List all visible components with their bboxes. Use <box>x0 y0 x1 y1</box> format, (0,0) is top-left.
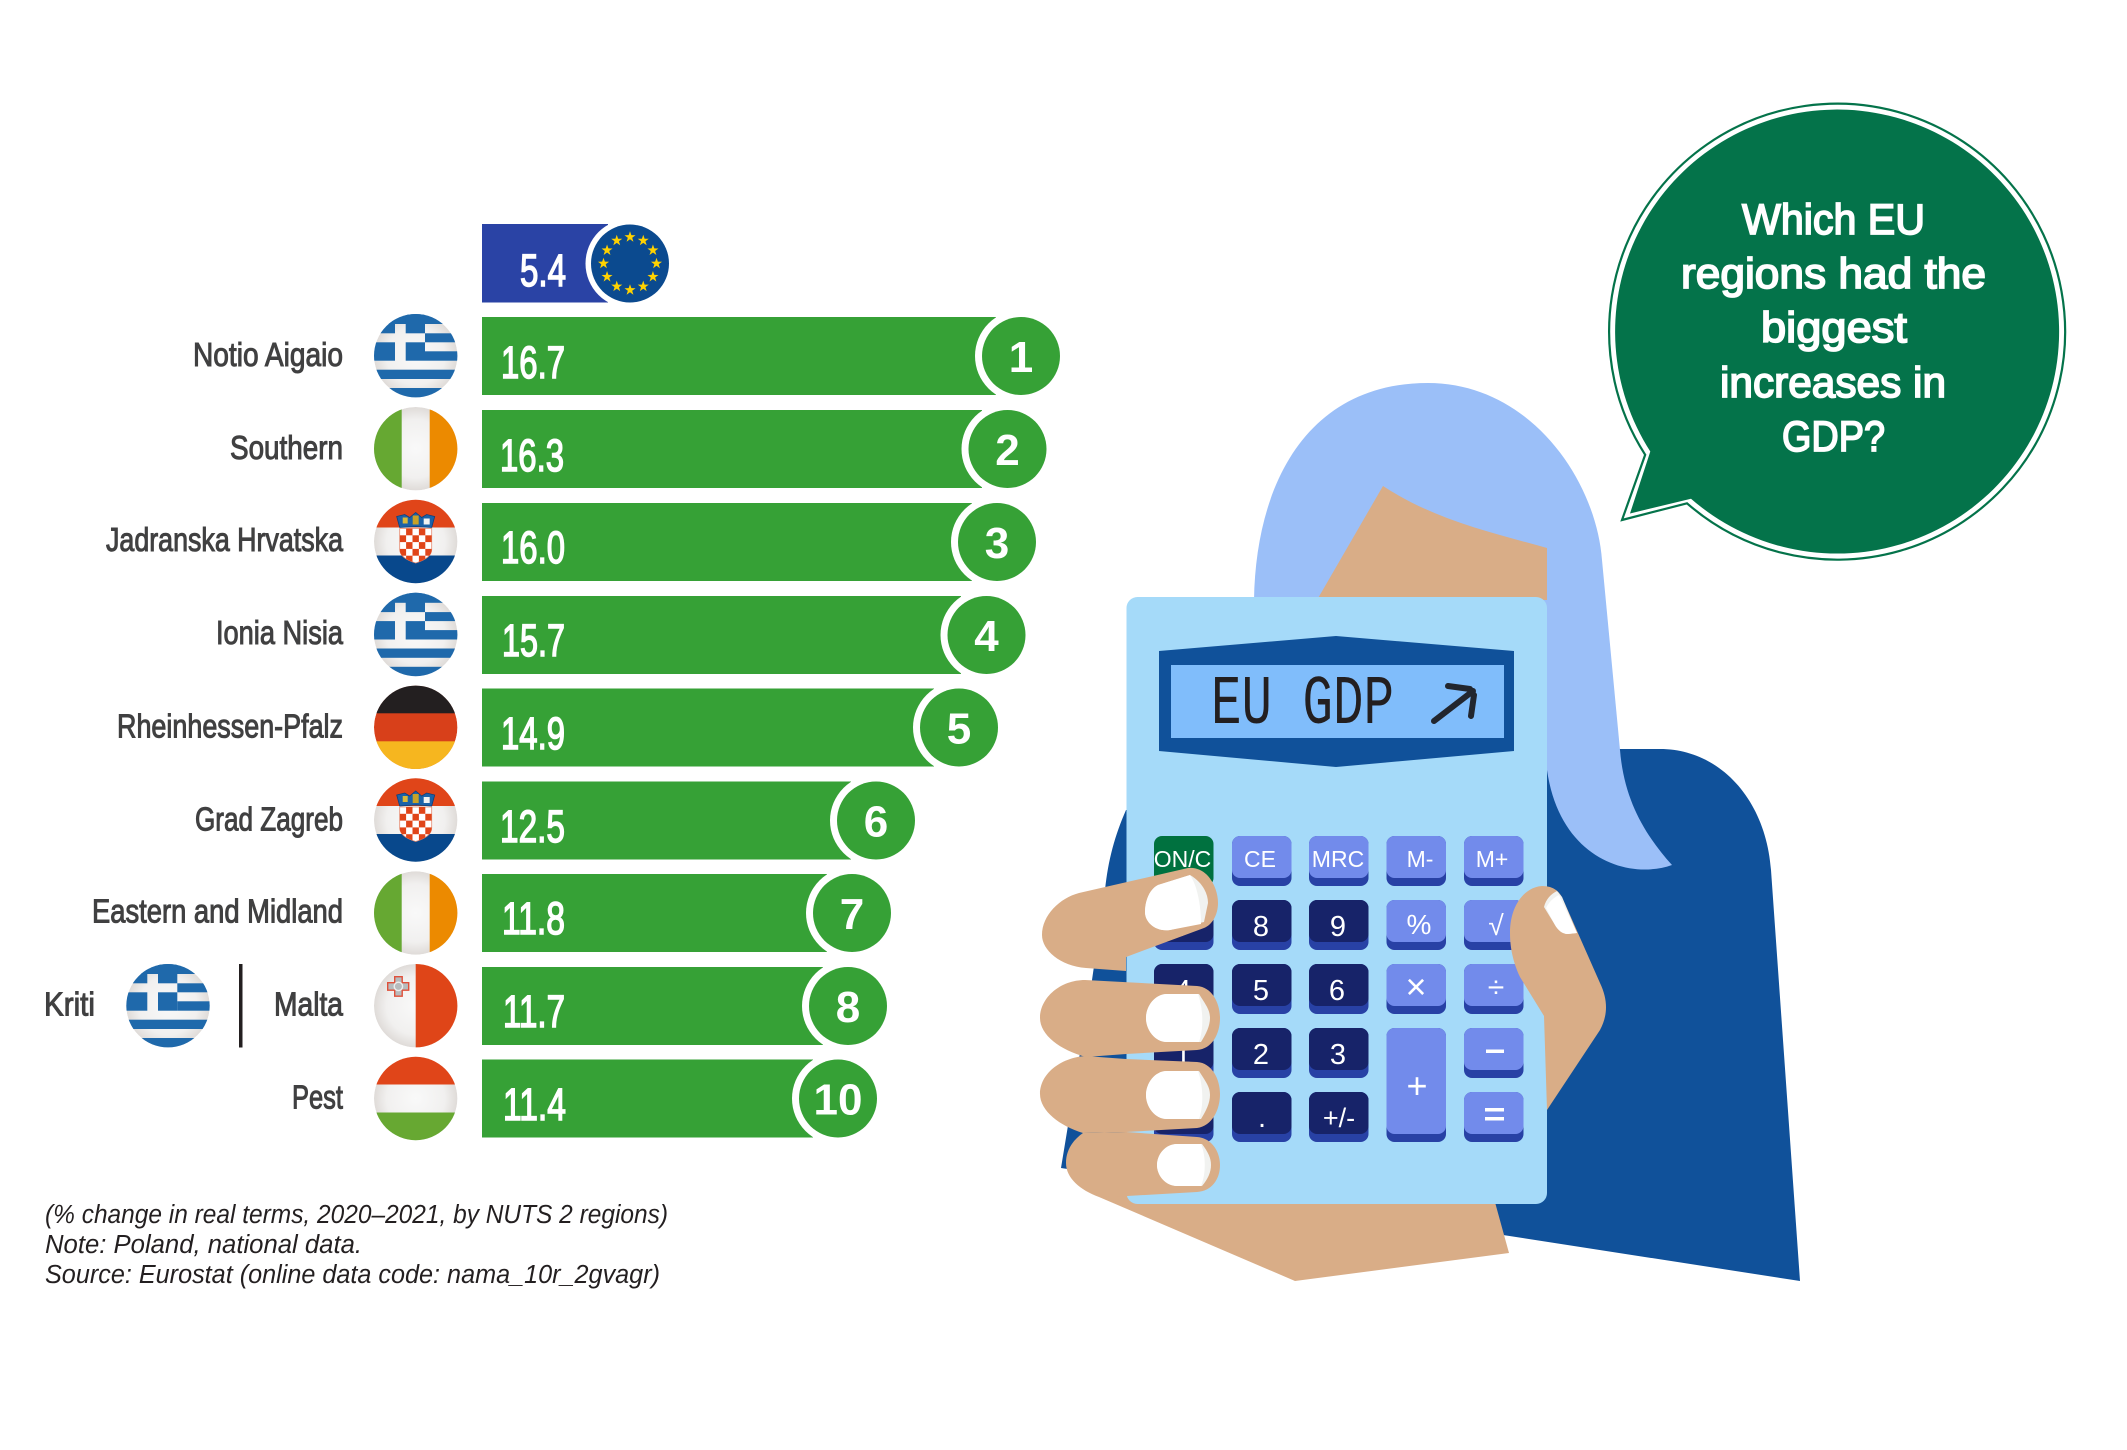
value: 16.0: 16.0 <box>501 522 565 573</box>
icon: up arrow on screen <box>1434 686 1474 721</box>
key divide <box>1464 964 1524 1014</box>
bar: Notio Aigaio <box>482 317 996 395</box>
value: 14.9: 14.9 <box>501 708 565 759</box>
icon: EU flag badge <box>586 219 674 308</box>
icon: flag of Greece <box>126 964 210 1048</box>
label: Eastern and Midland: Eastern and Midland <box>92 892 343 930</box>
key %: % <box>1407 909 1431 940</box>
key 6 <box>1309 964 1368 1014</box>
key MRC: MRC <box>1312 846 1364 872</box>
key multiply <box>1386 964 1446 1014</box>
key 3 <box>1309 1028 1368 1078</box>
key 4: 4 <box>1175 975 1191 1007</box>
row 8: Kriti and Malta (tie) <box>46 964 887 1048</box>
icon: flag of Greece <box>374 314 458 398</box>
key 5: 5 <box>1253 975 1269 1007</box>
label: Jadranska Hrvatska: Jadranska Hrvatska <box>106 521 344 558</box>
rank badge 10: 10 <box>814 1076 862 1124</box>
illustration: person holding calculator <box>1040 383 1800 1281</box>
icon: flag of Greece <box>374 592 458 677</box>
value: 11.7: 11.7 <box>503 986 565 1037</box>
hand: thumb with nail <box>1510 886 1606 1110</box>
key M+: M+ <box>1476 846 1508 872</box>
bar: Ionia Nisia <box>482 596 961 674</box>
key 2 <box>1232 1028 1292 1078</box>
rank badge 3: 3 <box>985 519 1009 568</box>
icon: flag of Croatia <box>374 778 458 862</box>
label: Southern: Southern <box>230 429 343 466</box>
footnote text: (% change in real terms, 2020–2021, by NUTS 2 regions) <box>45 1201 668 1229</box>
key plus/minus: +/- <box>1323 1103 1355 1133</box>
bar chart: GDP change by region <box>44 219 1067 1144</box>
label: Ionia Nisia: Ionia Nisia <box>216 614 344 651</box>
key ON/C: ON/C <box>1154 846 1211 872</box>
key 1: 1 <box>1175 1039 1191 1071</box>
label: Rheinhessen-Pfalz: Rheinhessen-Pfalz <box>117 708 343 744</box>
hand: palm <box>1099 1185 1509 1281</box>
key decimal point <box>1232 1092 1292 1142</box>
key 0 <box>1154 1092 1214 1142</box>
row 4: Ionia Nisia <box>216 589 1032 681</box>
key square root <box>1464 900 1524 950</box>
speech bubble with question <box>1609 104 2065 560</box>
key plus: + <box>1406 1065 1428 1106</box>
hand: finger 2 with nail <box>1040 980 1220 1057</box>
rank badge 5: 5 <box>947 704 971 754</box>
footnote text: Note: Poland, national data. <box>45 1231 362 1259</box>
rank badge 7: 7 <box>840 890 864 939</box>
calculator keypad <box>1154 836 1524 1142</box>
key equals <box>1464 1092 1524 1142</box>
person: hair <box>1254 383 1672 870</box>
label: Kriti: Kriti <box>44 986 95 1022</box>
row 1: Notio Aigaio <box>193 310 1067 402</box>
hand: finger 4 with nail <box>1066 1132 1220 1197</box>
key minus <box>1464 1028 1524 1078</box>
key 7 <box>1154 900 1214 950</box>
key 7: 7 <box>1175 911 1191 943</box>
rank badge 7 <box>806 867 898 959</box>
rank badge 8: 8 <box>836 983 860 1032</box>
rank badge 4: 4 <box>974 612 999 661</box>
rank badge 4 <box>940 589 1032 681</box>
bar: Grad Zagreb <box>482 782 851 860</box>
key 8 <box>1232 900 1292 950</box>
key 9: 9 <box>1330 911 1346 943</box>
footnote text: Source: Eurostat (online data code: nama_10r_2gvagr) <box>45 1261 660 1289</box>
calculator screen <box>1171 665 1504 745</box>
row 6: Grad Zagreb <box>195 774 922 866</box>
question text: GDP? <box>1782 413 1885 461</box>
rank badge 6 <box>830 774 922 866</box>
label: Pest: Pest <box>292 1078 343 1116</box>
bar: Pest <box>482 1060 813 1138</box>
key CE <box>1232 836 1292 886</box>
value: 15.7: 15.7 <box>502 615 565 666</box>
key M- <box>1386 836 1446 886</box>
rank badge 1 <box>975 310 1067 402</box>
icon: flag of Malta <box>374 964 458 1048</box>
key square root: √ <box>1488 910 1504 941</box>
key decimal point: . <box>1258 1102 1266 1134</box>
question text: increases in <box>1720 359 1946 407</box>
hand: finger 1 with nail <box>1042 868 1218 971</box>
rank badge 2 <box>962 403 1054 495</box>
key MRC <box>1309 836 1368 886</box>
calculator display bezel <box>1159 636 1514 767</box>
key M+ <box>1464 836 1524 886</box>
bar: EU average <box>482 224 608 302</box>
key 9 <box>1309 900 1368 950</box>
calculator body <box>1126 597 1547 1204</box>
label: Grad Zagreb: Grad Zagreb <box>195 800 343 838</box>
value: 12.5: 12.5 <box>500 801 565 852</box>
key 1 <box>1154 1028 1214 1078</box>
rank badge 2: 2 <box>995 426 1020 475</box>
hand: finger 3 with nail <box>1040 1056 1220 1133</box>
tie divider <box>239 964 242 1048</box>
rank badge 8 <box>802 960 894 1052</box>
bar: Eastern and Midland <box>482 874 827 952</box>
bar: Jadranska Hrvatska <box>482 503 972 581</box>
key plus/minus <box>1309 1092 1368 1142</box>
key % <box>1386 900 1446 950</box>
question text: biggest <box>1761 304 1907 352</box>
value: 11.8: 11.8 <box>502 893 565 944</box>
key 5 <box>1232 964 1292 1014</box>
footnote text <box>45 1201 668 1289</box>
key 3: 3 <box>1330 1039 1346 1071</box>
key M-: M- <box>1407 846 1433 872</box>
row 3: Jadranska Hrvatska <box>106 496 1043 588</box>
bar: Southern <box>482 410 982 488</box>
value: 16.3: 16.3 <box>500 430 564 481</box>
key 4 <box>1154 964 1214 1014</box>
screen text: EU GDP <box>1211 666 1394 745</box>
label: Notio Aigaio: Notio Aigaio <box>193 336 343 373</box>
icon: flag of Ireland <box>374 871 458 955</box>
key 2: 2 <box>1253 1039 1269 1071</box>
rank badge 5 <box>913 682 1005 774</box>
value: EU average: 5.4 <box>520 245 566 296</box>
person: blue jacket <box>1061 749 1800 1281</box>
question text: Which EU <box>1742 196 1925 244</box>
key 6: 6 <box>1329 975 1345 1007</box>
key plus <box>1386 1028 1446 1142</box>
row 2: Southern <box>230 403 1054 495</box>
person: face <box>1317 486 1547 600</box>
row 7: Eastern and Midland <box>92 867 898 959</box>
key 8: 8 <box>1253 911 1269 943</box>
value: 11.4: 11.4 <box>503 1079 566 1130</box>
question text <box>1681 196 1986 461</box>
question text: regions had the <box>1681 250 1986 298</box>
row: EU average <box>482 219 674 308</box>
key multiply: × <box>1405 966 1427 1007</box>
icon: flag of Germany <box>374 685 458 769</box>
rank badge 6: 6 <box>864 798 888 846</box>
key 0: 0 <box>1175 1102 1191 1134</box>
key divide: ÷ <box>1488 971 1504 1004</box>
bar: Rheinhessen-Pfalz <box>482 688 934 766</box>
icon: flag of Ireland <box>374 407 458 491</box>
rank badge 1: 1 <box>1009 333 1033 382</box>
row 5: Rheinhessen-Pfalz <box>117 682 1005 774</box>
icon: flag of Croatia <box>374 500 458 584</box>
row 10: Pest <box>292 1052 884 1144</box>
label: Malta: Malta <box>274 986 344 1022</box>
key ON/C <box>1154 836 1214 886</box>
bar: Kriti and Malta <box>482 967 823 1045</box>
value: 16.7: 16.7 <box>501 337 565 388</box>
rank badge 3 <box>951 496 1043 588</box>
key CE: CE <box>1244 846 1276 872</box>
rank badge 10 <box>792 1052 884 1144</box>
icon: flag of Hungary <box>374 1056 458 1140</box>
